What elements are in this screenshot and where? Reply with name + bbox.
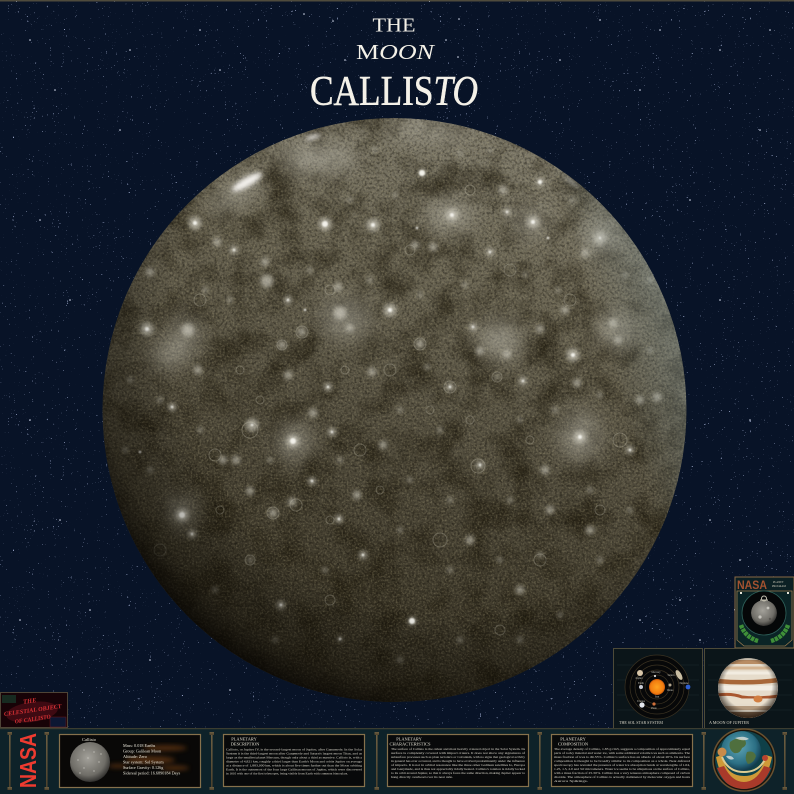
tag: the celestial object — [0, 692, 68, 728]
panel: the Sol star system — [614, 648, 702, 728]
body text: 1.25, 1.5, 2.0 and 3.0 micrometers. Water ice seems to be ubiquitous on the surface of Callisto, — [554, 767, 690, 772]
body text: to its orbit around Jupiter, so that it always faces the same direction, making Jupiter appear to — [391, 771, 525, 776]
flame backdrop — [108, 745, 189, 770]
divider columns — [8, 732, 787, 790]
badge shield — [737, 591, 792, 646]
planet labels — [635, 671, 689, 710]
crater rings — [154, 185, 627, 635]
panel: planetary description: DESCRIPTION — [231, 742, 260, 746]
card facts: Group: Galilean Moon — [123, 748, 162, 754]
body text: The average density of Callisto, 1.83 g/cm3, suggests a composition of approximately equal — [554, 747, 690, 752]
body text: at a distance of 1,883,000 km, which is about five times further out than the Moon orbiting — [226, 764, 362, 768]
limb highlights — [230, 133, 581, 194]
body text: surface is completely covered with impact craters. It does not show any signatures of — [391, 751, 526, 755]
card moon — [70, 742, 110, 782]
planet labels: Pluto — [651, 707, 657, 710]
body text: in general has ever occurred, and is thought to have evolved predominantly under the influence — [391, 759, 525, 764]
body text: large as the smallest planet Mercury, though only about a third as massive. Callisto is, with a — [226, 756, 362, 760]
tag: the celestial object: THE — [23, 697, 38, 706]
body text: dioxide. The atmosphere of Callisto is actually dominated by molecular oxygen and hosts — [554, 775, 691, 779]
card facts: Surface Gravity: 0.126g — [123, 765, 164, 770]
planet labels: Mercury — [651, 671, 661, 674]
heading: PLANETARY — [560, 736, 587, 742]
flame arc — [716, 755, 772, 782]
planet labels: Earth — [638, 682, 645, 685]
body text: of impacts. It is not in orbital resonance like the three other Galilean satellites Io, Europa — [391, 763, 525, 768]
tag: the celestial object: OF CALLISTO — [15, 714, 52, 725]
planet labels: Jupiter — [635, 677, 643, 680]
body text: The surface of Callisto is the oldest and most heavily cratered object in the Solar System. Its — [391, 747, 526, 751]
body text — [226, 748, 363, 776]
body text: Aurora Spikings. — [554, 779, 588, 783]
badge moon — [751, 600, 777, 626]
badge: NASA planet program — [735, 577, 794, 648]
blue-grey right limb — [576, 182, 686, 506]
planet Callisto — [102, 118, 687, 702]
badge caption: PLANET — [773, 581, 784, 584]
heading: PLANETARY — [231, 736, 258, 742]
NASA wordmark in badge: NASA — [737, 578, 767, 592]
heading: PLANETARY — [396, 736, 423, 742]
panel: planetary description — [224, 734, 364, 786]
planet labels: Uranus — [637, 700, 645, 703]
NASA worm logo: NASA — [15, 733, 41, 788]
body text: Earth. It is the outermost of the four large Galilean moons of Jupiter, which were discovered — [226, 768, 362, 772]
emblem: Earth and flames medallion — [713, 729, 775, 791]
bottom info strip — [0, 728, 794, 794]
title line: MOON: MOON — [356, 40, 435, 64]
body text: mass fraction of ices is 49-55%. Callisto's surface has an albedo of about 20%. Its surface — [554, 755, 690, 759]
body text: in 1610 with one of the first telescopes, being visible from Earth with common binoculars. — [226, 772, 348, 776]
panel: planetary composition — [552, 734, 692, 786]
badge: NASA planet program: PROGRAM — [772, 585, 786, 588]
badge stars — [740, 592, 789, 594]
panel: planetary characteristics: CHARACTERISTICS — [390, 742, 431, 746]
bright regional patches — [152, 122, 635, 528]
panel: a moon of Jupiter — [704, 648, 794, 728]
sun — [649, 679, 665, 695]
badge emblem — [760, 596, 768, 601]
limb shadow — [102, 228, 636, 702]
body text: composition is thought to be broadly similar to its composition as a whole. Near-infrared — [554, 759, 690, 763]
body text: subsurface processes such as plate tectonics or volcanism, with no signs that geological activity — [391, 755, 525, 760]
panel: planetary composition: COMPOSITION — [558, 742, 589, 746]
badge laurels — [741, 625, 788, 641]
body text: System it is the third-largest moon after Ganymede and Saturn's largest moon Titan, and as — [226, 752, 363, 756]
title line: THE: THE — [372, 14, 416, 36]
title line: CALLISTO: CALLISTO — [310, 69, 478, 115]
body text: Callisto, or Jupiter IV, is the second-largest moon of Jupiter, after Ganymede. In the Solar — [226, 748, 363, 752]
card facts: Sidereal period: 16.6890184 Days — [123, 770, 181, 776]
body text: and Ganymede, and is thus not appreciably tidally heated. Callisto's rotation is tidally locked — [391, 767, 525, 772]
soft crater blooms — [125, 150, 657, 660]
planets — [637, 669, 690, 708]
card facts — [123, 743, 181, 776]
planet labels: Neptune — [679, 682, 689, 685]
card facts: Altitude: Zero — [123, 754, 147, 759]
title — [310, 14, 478, 115]
small planets — [718, 748, 726, 756]
planet labels: Sun — [655, 696, 660, 698]
panel caption: A MOON OF JUPITER — [709, 720, 749, 725]
body text — [554, 747, 691, 783]
panel: Callisto data card — [60, 734, 200, 788]
planet labels: Venus — [667, 689, 673, 692]
panel caption: THE SOL STAR SYSTEM — [619, 720, 663, 725]
panel: planetary characteristics — [388, 734, 528, 786]
body text — [391, 747, 526, 779]
card facts: Mass: 0.018 Earths — [123, 743, 156, 748]
body text: with a mass fraction of 25-50%. Callisto has a very tenuous atmosphere composed of carbon — [554, 771, 690, 775]
globe — [721, 731, 761, 771]
body text: parts of rocky material and water ice, with some additional volatile ices such as ammonia. The — [554, 751, 690, 756]
crisp bright crater spots — [140, 173, 630, 639]
orbits — [625, 655, 689, 719]
planet labels: Saturn — [667, 674, 675, 677]
tag: the celestial object: CELESTIAL OBJECT — [4, 704, 62, 718]
card title: Callisto — [82, 737, 97, 742]
Jupiter — [717, 657, 779, 719]
body text: spectroscopy has revealed the presence of water ice absorption bands at wavelengths of 1.04, — [554, 763, 690, 768]
card facts: Star system: Sol System — [123, 760, 164, 764]
body text: hang directly overhead over its near side. — [391, 775, 453, 779]
body text: diameter of 4,821 km, roughly a third larger than Earth's Moon and orbits Jupiter on average — [226, 760, 362, 764]
